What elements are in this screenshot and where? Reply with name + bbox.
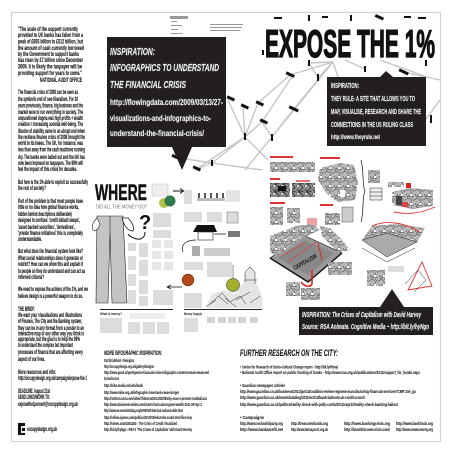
inspiration callout: they rule: INSPIRATION: — [331, 83, 359, 90]
isometric platform right — [362, 223, 425, 262]
paragraph: the brief: aspect of our lives. — [18, 357, 45, 363]
quote: national audit office: 2009. It is likely the taxpayer will be — [18, 64, 82, 70]
inspiration callout: infographics: INFOGRAPHICS TO UNDERSTAND — [110, 62, 219, 74]
list heading: MORE INFOGRAPHIC INSPIRATION: — [104, 351, 162, 357]
quote: national audit office: the amount of cash currently borrowed — [18, 46, 84, 52]
paragraph: questions: What social relationships does it generate or — [18, 256, 83, 262]
quote: national audit office: providing support for years to come." — [18, 71, 82, 77]
paragraph: the brief: THE BRIEF: — [18, 307, 35, 313]
question mark with arrow: ? — [139, 212, 151, 234]
paragraph: global finance: hidden behind descriptions deliberately — [18, 212, 72, 218]
list: more infographic inspiration: http://www.mike.org.uk/infographic-how-bank-cease-burger — [104, 390, 179, 395]
paragraph: the brief — [18, 307, 84, 363]
paragraph: global finance: understandable. — [18, 237, 42, 243]
left column text: exposethe1percent@occupydesign.org.uk — [18, 402, 78, 408]
paragraph: questions — [18, 249, 85, 281]
paragraph: financial crisis: market were to run everything in society. The — [18, 110, 83, 116]
further research on the city: http://treasureislands.org — [291, 421, 328, 426]
paragraph: questions: But what does the financial system look like? — [18, 249, 83, 255]
map legend — [170, 16, 243, 34]
paragraph: financial crisis: feel the impact of this crisis for decades. — [18, 167, 77, 173]
paragraph: financial crisis: now been imposed on taxpayers. The 99% will — [18, 161, 83, 167]
paragraph: global finance: designed to confuse: 'credit default swaps', — [18, 218, 80, 224]
left column text: less than away from the cash machines running — [18, 148, 85, 154]
list: more infographic inspiration: http://bit.ly/hyNgn - RSA's 'The Crises of Capitalism' with David Harvey — [104, 427, 192, 432]
paragraph: global finance: little or no idea how global finance works, — [18, 205, 79, 211]
rubble and capitol sketch — [205, 265, 263, 308]
green coin with sketch box — [152, 184, 176, 208]
further research heading: FURTHER RESEARCH ON THE CITY: — [240, 348, 338, 359]
paragraph: the brief: processes of finance that are affecting every — [18, 350, 83, 356]
further research on the city: http://www.bankingcrisis.org — [344, 421, 390, 426]
flow chain — [197, 190, 240, 223]
resources: More resources and info: — [18, 370, 56, 376]
paragraph: the brief: interactive map or any other way you think is — [18, 332, 84, 338]
isometric platform left — [270, 235, 342, 286]
paragraph: global finance: 'asset backed securities', 'derivatives', — [18, 225, 75, 231]
inspiration callout: they rule: http://www.theyrule.net — [331, 134, 381, 141]
inspiration callout: they rule — [327, 71, 426, 146]
inspiration callout: infographics: INSPIRATION: — [110, 46, 155, 58]
trousers illustration — [92, 216, 134, 303]
paragraph: financial crisis: the reckless finance crisis of 2008 brought the — [18, 135, 85, 141]
capitalism comic sketch — [270, 156, 435, 300]
orange coin — [182, 274, 194, 286]
paragraph: financial crisis — [17, 90, 85, 173]
deadline — [18, 389, 78, 408]
paragraph: the brief: to understand the complex but important — [18, 343, 73, 349]
list: more infographic inspiration: http://www.ifiscorule.net — [104, 376, 119, 381]
brace divider — [361, 160, 365, 222]
quote: national audit office: has risen by £7 billion since December — [18, 58, 83, 64]
paragraph: expose — [18, 287, 88, 300]
left column text — [17, 27, 88, 435]
paragraph: the brief: appropriate, but the goal is to help the 99% — [18, 337, 80, 343]
network links — [173, 60, 440, 170]
arrow — [173, 188, 184, 194]
paragraph: financial crisis: unquestioned dogma was high profits + wealth — [18, 116, 83, 122]
inspiration callout: infographics — [107, 37, 226, 170]
occupy design logo — [18, 423, 57, 435]
paragraph: exploiting society — [18, 180, 88, 192]
quote: national audit office: NATIONAL AUDIT OFFICE — [40, 78, 82, 84]
further research on the city: http://www.banktrack.org — [396, 421, 433, 426]
paragraph: exploiting society: But how is the 1% able to exploit so successfully — [18, 180, 88, 186]
text blocks middle — [153, 190, 232, 308]
left column text: illusion of stability came to an abrupt end when — [18, 129, 85, 135]
deadline: SEND LINKS/WORK TO: — [18, 395, 50, 401]
further research on the city: http://www.bernayscrit.org.uk — [291, 427, 328, 432]
further research on the city: • Campaigns — [240, 415, 264, 420]
text: http://occupydesign.org.uk/campaign/expose-the-1 — [18, 376, 87, 382]
inspiration callout: infographics: THE FINANCIAL CRISIS — [110, 79, 186, 91]
where did the money go panel — [92, 180, 263, 334]
paragraph: global finance: Part of the problem is that most people have — [18, 199, 83, 205]
resources — [18, 370, 87, 382]
bank building — [182, 225, 240, 256]
further research on the city: http://bondsforusercrisis.com/ — [344, 427, 390, 432]
comic grey blob — [318, 157, 358, 225]
paragraph: expose: believe design is a powerful weapon to do so. — [18, 294, 83, 300]
paragraph: the brief: of Finance, The City and the Banking system, — [18, 319, 82, 325]
quote: national audit office: provided to UK banks has fallen from a — [18, 33, 83, 39]
arrow left — [167, 285, 182, 289]
paragraph: expose: We need to expose the actions of the 1%, and we — [18, 287, 88, 293]
list: more infographic inspiration: http://online.sjones.com/politics/2010/03/what-she-could-19-trillion-buy — [104, 415, 192, 420]
lower right sketches — [367, 262, 432, 292]
paragraph: global finance: 'private finance initiatives' this is completely — [18, 231, 83, 237]
paragraph: financial crisis: The financial crisis of 2008 can be seen as — [18, 90, 78, 96]
paragraph: financial crisis: the symbolic end of neo-liberalism. For 30 — [18, 97, 78, 103]
section: money supply — [184, 309, 262, 332]
left column text: to people so they do understand and can act as — [18, 269, 85, 275]
paragraph: questions: informed citizens? — [18, 275, 44, 281]
question mark with arrow — [128, 212, 151, 239]
where subheading: DID ALL THE MONEY GO? — [96, 204, 147, 210]
network figures — [171, 14, 432, 172]
comic top-left panels — [270, 156, 317, 226]
paragraph: the brief: they can be in any format from a poster to an — [18, 326, 84, 332]
paragraph: financial crisis: world to its knees. The UK, for instance, was — [17, 141, 83, 147]
inspiration callout: infographics: http://flowingdata.com/2009/03/13/27- — [110, 97, 223, 107]
quote: national audit office: "The scale of the support currently — [18, 27, 78, 33]
quote: national audit office: peak of £955 billion to £512 billion, but — [18, 40, 83, 46]
inspiration callout: infographics: visualizations-and-infographics-to- — [110, 113, 211, 123]
list: more infographic inspiration: http://occupydesign.org.uk/gallery/designs — [104, 364, 154, 369]
further research on the city: • Centre for Research of Socio-Cultural Change report - http://bit.ly/Hbeyl — [240, 364, 338, 370]
further research on the city: http://www.guardian.co.uk/news/datablog/2011/oct/13/bank-bailouts-uk-credit-crunch — [240, 395, 365, 400]
list: more infographic inspiration: http://bit.ly/Mfo4v0 - Flowingdata — [104, 358, 134, 363]
list: more infographic inspiration: http://www.economistsblog.org/2009/02/historical-national-debt.html — [104, 408, 183, 413]
list: more infographic inspiration: http://voltcon.com.com/video/7/ideorso/2012/02/08/why-save-1-percent-rockball.asx — [104, 396, 207, 401]
list: more infographic inspiration — [104, 351, 209, 432]
section: what is money: What is money? — [100, 311, 122, 316]
paragraph: global finance — [18, 199, 83, 243]
inspiration callout: infographics: understand-the-financial-crisis/ — [110, 128, 204, 138]
quote: national audit office — [18, 27, 84, 84]
further research on the city: http://www.banksarefit.net — [240, 427, 283, 432]
paragraph: financial crisis: years previously, finance, big business and the — [18, 104, 83, 110]
paragraph: exploiting society: the rest of society? — [18, 186, 46, 192]
paragraph: the brief: We want your visualisations and illustrations — [18, 313, 82, 319]
list: more infographic inspiration: http://www.businessinsider.com/charts-facts-about-great-wealth-2011-09?op=1 — [104, 402, 202, 407]
section: what is money — [100, 309, 173, 334]
list: more infographic inspiration: http://nibs.media.mit.edu/bank — [104, 383, 143, 388]
further research on the city — [240, 348, 433, 432]
sketch figures around left platform — [270, 224, 352, 300]
paragraph: questions: restrict? How can we show this and explain it — [18, 262, 83, 268]
section: money supply: Money Supply — [184, 311, 203, 316]
where heading: WHERE — [95, 180, 147, 205]
inspiration callout: crises of capitalism — [299, 289, 433, 335]
flow diagrams — [152, 240, 173, 270]
deadline: DEADLINE: August 21st — [18, 389, 50, 395]
flow chart column — [128, 243, 148, 306]
occupy design logo: occupydesign.org.uk — [27, 427, 57, 433]
isometric platform left: CAPITALISM — [293, 254, 318, 272]
further research on the city: • Guardian newspaper articles — [240, 383, 285, 388]
quote: national audit office: by the Government to support banks — [18, 52, 79, 58]
network map background — [170, 14, 440, 172]
comic right panel — [368, 170, 435, 213]
further research on the city: http://www.rocksolidparty.org — [240, 421, 283, 426]
list: more infographic inspiration: http://www.good.is/post/geoms-financial-crisis-infographic-content-mouse-measured — [104, 370, 209, 375]
list: more infographic inspiration: http://vimeo.com/3261263 - The Crisis of Credit Visualized — [104, 421, 177, 426]
paragraph: financial crisis: creation = increasing societal well-being. The — [18, 122, 83, 128]
paragraph: financial crisis: dry. The banks were bailed out and the bill has — [18, 155, 85, 161]
